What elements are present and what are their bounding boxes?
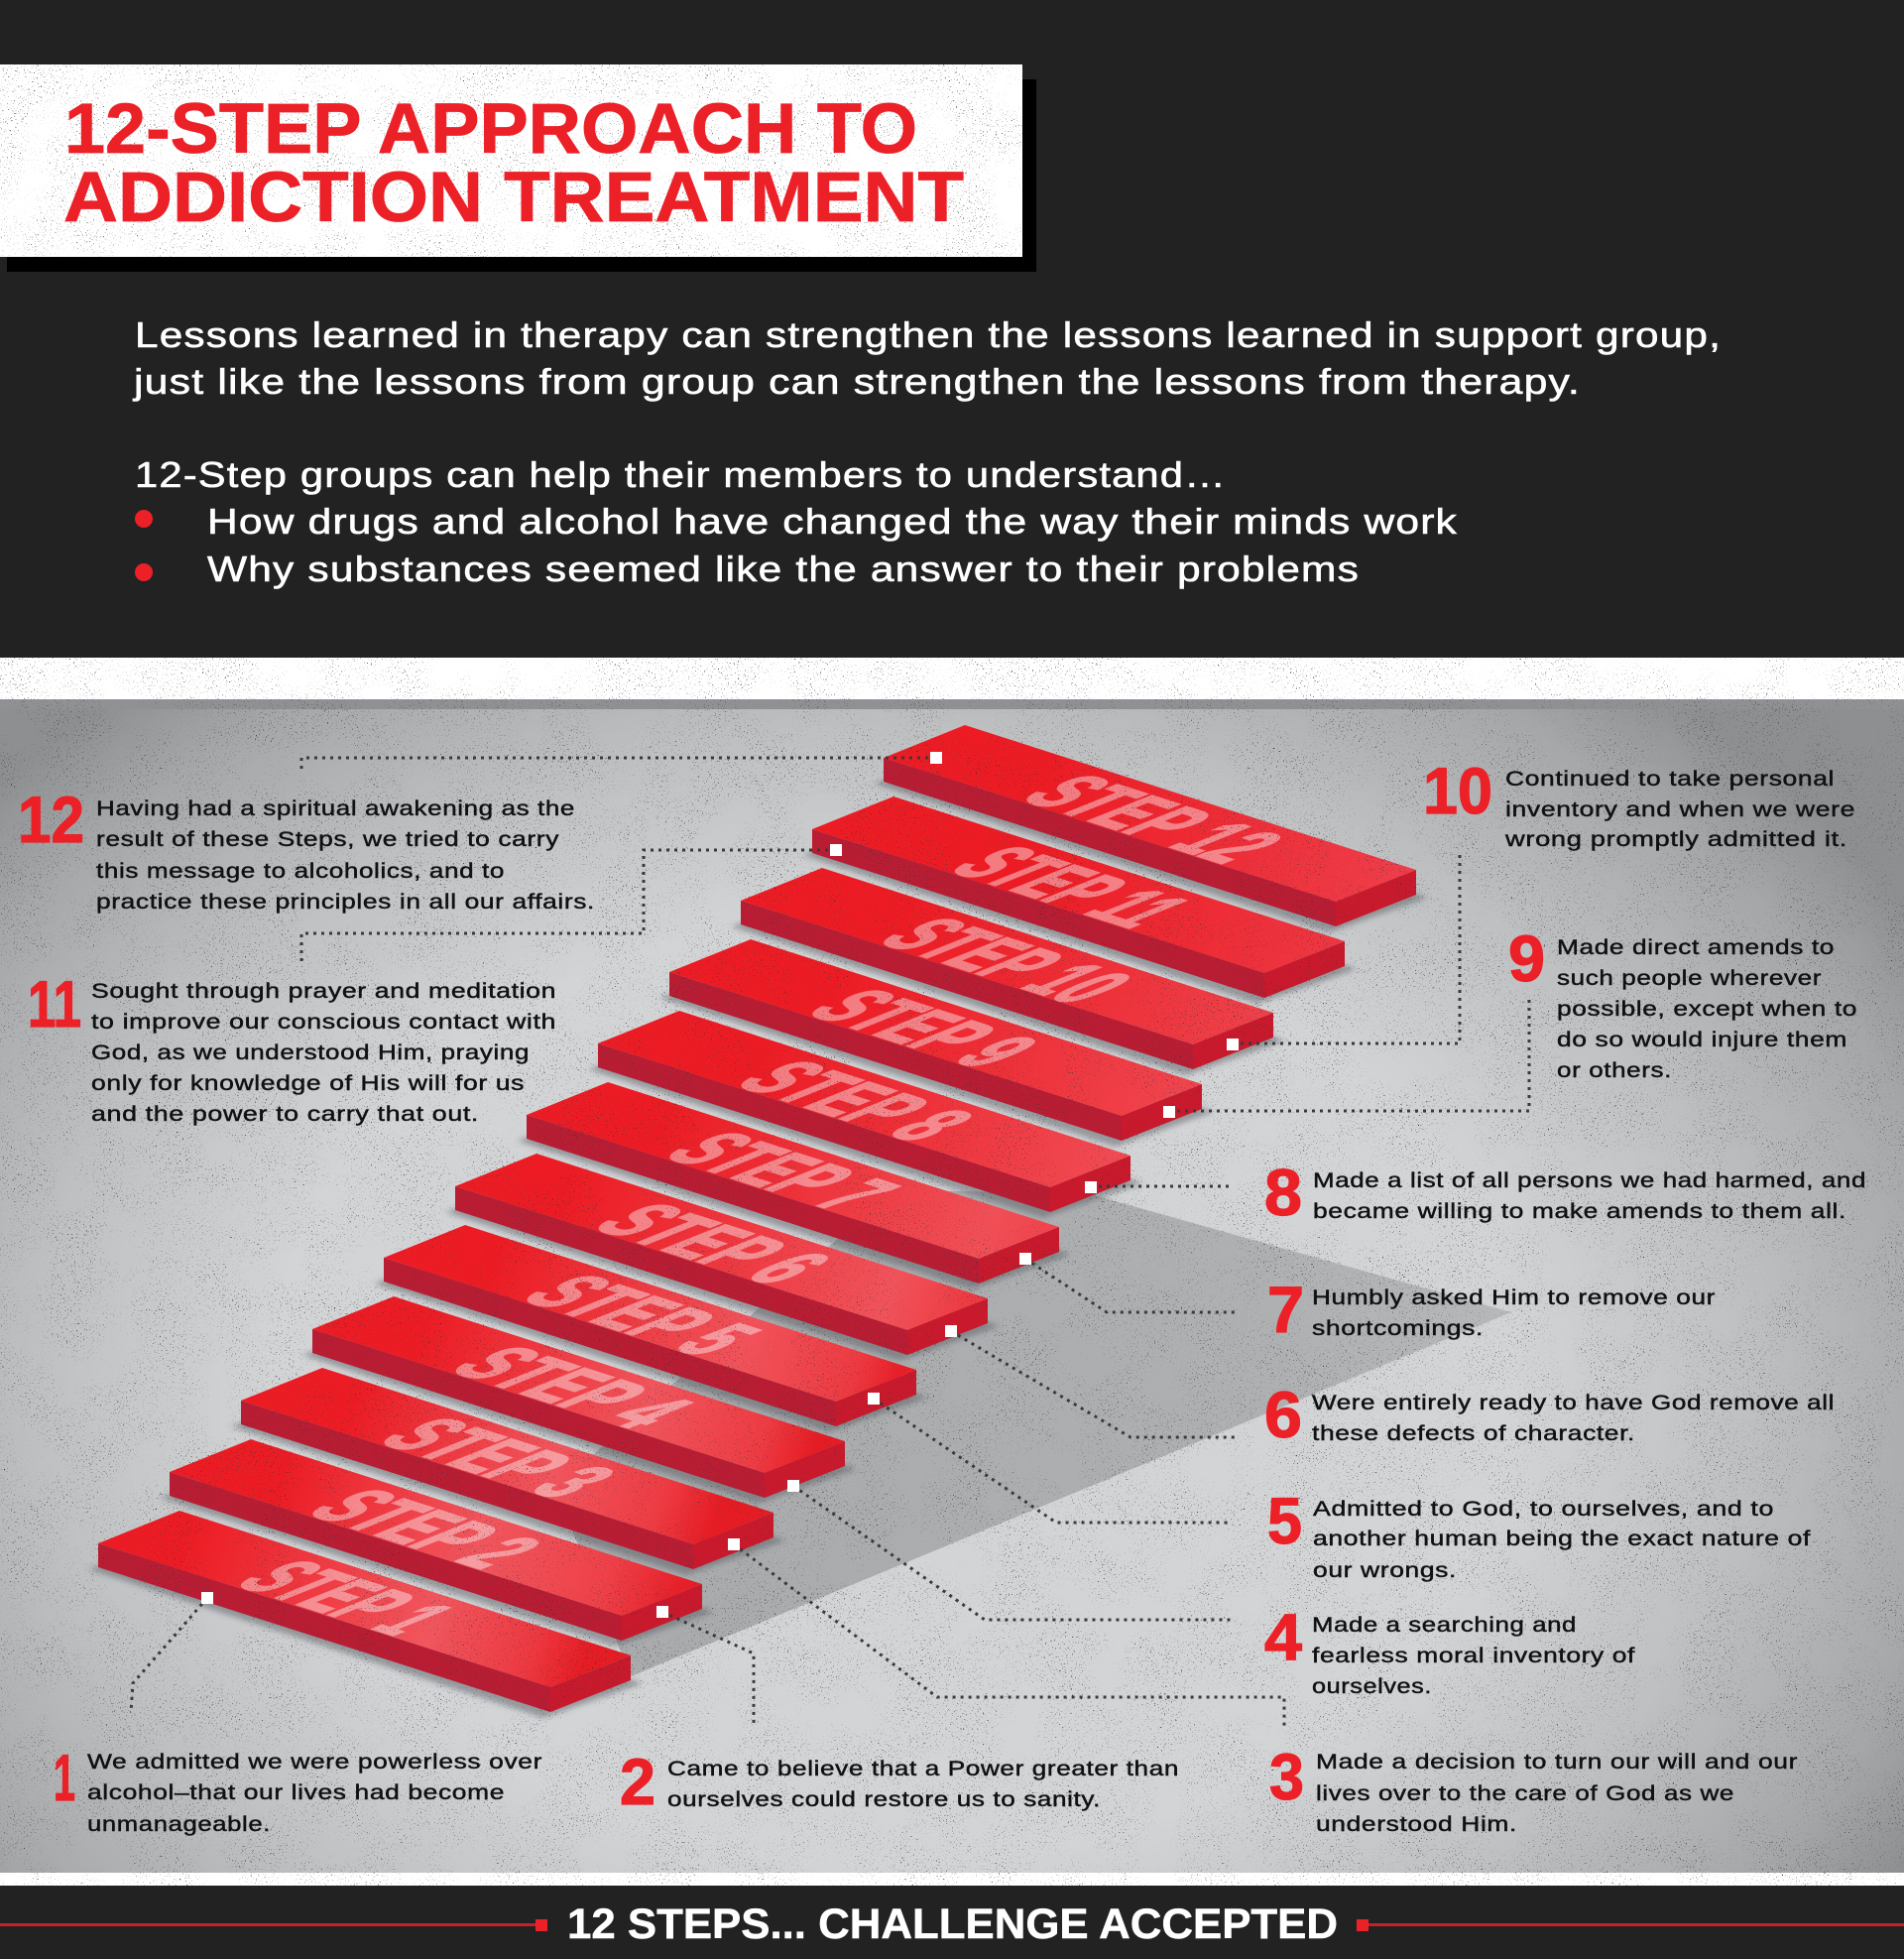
step 6 [445, 1154, 1000, 1361]
step 7 description: shortcomings. [1312, 1316, 1484, 1340]
step 11 description: 11 [28, 967, 81, 1041]
dark footer band [0, 1886, 1904, 1959]
step 5: STEP 5 [499, 1266, 783, 1365]
step 10: STEP 10 [856, 909, 1157, 1013]
step 12 [874, 725, 1428, 932]
step 1 description: alcohol–that our lives had become [87, 1780, 505, 1804]
step 11 description: and the power to carry that out. [91, 1102, 479, 1126]
footer tagline [0, 1900, 1904, 1948]
step 7 description: Humbly asked Him to remove our [1312, 1286, 1716, 1309]
step 9 description: do so would injure them [1557, 1028, 1847, 1051]
step 1: STEP 1 [213, 1551, 478, 1645]
step 1 description: unmanageable. [87, 1812, 271, 1836]
step 4 description: ourselves. [1312, 1674, 1432, 1698]
step 8 description [1264, 1156, 1866, 1229]
staircase [88, 725, 1428, 1718]
step 5 description: 5 [1267, 1484, 1302, 1557]
step 8 description: became willing to make amends to them all. [1313, 1199, 1846, 1223]
step 3: STEP 3 [356, 1408, 640, 1508]
step 7 description [1267, 1273, 1716, 1346]
step 3 [231, 1368, 785, 1575]
step 11 description: to improve our conscious contact with [91, 1010, 556, 1034]
step 5 description: our wrongs. [1313, 1558, 1457, 1582]
step 10 description: wrong promptly admitted it. [1504, 827, 1847, 851]
step 10 description: Continued to take personal [1505, 767, 1835, 791]
step 12 description: 12 [18, 783, 84, 856]
dotted connectors [131, 758, 1529, 1727]
step 4 [302, 1296, 857, 1504]
step 12: STEP 12 [999, 766, 1307, 873]
step 11 [802, 796, 1357, 1004]
step 12 description [18, 783, 595, 914]
step 2 description: ourselves could restore us to sanity. [667, 1787, 1101, 1811]
speckle texture [0, 699, 1904, 1886]
dark header background [0, 0, 1904, 658]
step 11 description: Sought through prayer and meditation [91, 979, 556, 1003]
step 6 description [1264, 1378, 1835, 1451]
cast shadow of staircase [555, 1190, 1511, 1676]
title banner: ADDICTION TREATMENT [63, 159, 964, 237]
white band [0, 658, 1904, 699]
step 5 description: another human being the exact nature of [1313, 1527, 1811, 1550]
footer tagline: 12 STEPS... CHALLENGE ACCEPTED [567, 1900, 1338, 1948]
step 2: STEP 2 [285, 1480, 566, 1578]
step 9: STEP 9 [784, 980, 1063, 1077]
step 5 [374, 1225, 928, 1432]
step 8 description: Made a list of all persons we had harmed, and [1313, 1168, 1866, 1192]
step 2 description: Came to believe that a Power greater than [667, 1757, 1179, 1780]
step 7 [517, 1082, 1071, 1289]
step 1 description [54, 1741, 542, 1836]
step 10 [731, 868, 1285, 1075]
step 4: STEP 4 [427, 1337, 717, 1438]
intro text: Lessons learned in therapy can strengthen the lessons learned in support group, [135, 314, 1722, 355]
step 11 description: God, as we understood Him, praying [91, 1041, 530, 1064]
bullet dots [135, 510, 153, 581]
step 9 description: 9 [1508, 921, 1545, 995]
step 7 description: 7 [1267, 1273, 1304, 1346]
step 1 description: We admitted we were powerless over [87, 1750, 542, 1774]
step 5 description: Admitted to God, to ourselves, and to [1313, 1497, 1774, 1521]
title banner: 12-STEP APPROACH TO [64, 90, 917, 169]
step 12 description: this message to alcoholics, and to [96, 859, 505, 883]
step 11 description [28, 967, 556, 1126]
step 8 [588, 1011, 1142, 1218]
step 9 description [1508, 921, 1857, 1082]
step 12 description: result of these Steps, we tried to carry [96, 827, 559, 851]
step 9 description: or others. [1557, 1058, 1672, 1082]
step 11 description: only for knowledge of His will for us [91, 1071, 525, 1095]
intro text: just like the lessons from group can strengthen the lessons from therapy. [133, 361, 1581, 402]
intro text: 12-Step groups can help their members to understand… [135, 454, 1227, 495]
step 8 description: 8 [1264, 1156, 1302, 1229]
step 6 description: 6 [1264, 1378, 1302, 1451]
step 3 description: 3 [1269, 1740, 1304, 1813]
step 7: STEP 7 [642, 1123, 922, 1220]
step 4 description: 4 [1264, 1600, 1302, 1673]
intro text: Why substances seemed like the answer to their problems [207, 549, 1360, 589]
step 9 description: Made direct amends to [1557, 935, 1835, 959]
step 9 [659, 939, 1214, 1147]
step 12 description: practice these principles in all our affairs. [96, 890, 595, 914]
step 3 description: lives over to the care of God as we [1316, 1781, 1734, 1805]
connector markers [201, 752, 1239, 1618]
step 3 description: Made a decision to turn our will and our [1316, 1750, 1798, 1774]
step 6: STEP 6 [570, 1194, 855, 1293]
step 12 description: Having had a spiritual awakening as the [96, 796, 575, 820]
step 11: STEP 11 [927, 837, 1214, 937]
step 3 description: understood Him. [1316, 1812, 1517, 1836]
step 4 description: Made a searching and [1312, 1613, 1577, 1637]
intro text [133, 314, 1722, 589]
step 8: STEP 8 [713, 1051, 998, 1151]
title banner [0, 64, 1036, 272]
step 2 description: 2 [620, 1745, 655, 1818]
intro text: How drugs and alcohol have changed the way their minds work [207, 501, 1458, 542]
step 3 description [1269, 1740, 1798, 1836]
step 10 description: 10 [1423, 754, 1492, 827]
step 2 description [620, 1745, 1179, 1818]
step 6 description: Were entirely ready to have God remove all [1312, 1391, 1835, 1414]
step 5 description [1267, 1484, 1811, 1582]
step 9 description: possible, except when to [1557, 997, 1857, 1021]
step 6 description: these defects of character. [1312, 1421, 1635, 1445]
step 10 description [1423, 754, 1855, 851]
step 4 description [1264, 1600, 1635, 1698]
step 1 [88, 1511, 643, 1718]
step 1 description: 1 [54, 1741, 75, 1814]
step 2 [160, 1439, 714, 1647]
step 4 description: fearless moral inventory of [1312, 1644, 1635, 1667]
step 9 description: such people wherever [1557, 966, 1822, 990]
step 10 description: inventory and when we were [1505, 797, 1855, 821]
panel: stairs background [0, 699, 1904, 1886]
